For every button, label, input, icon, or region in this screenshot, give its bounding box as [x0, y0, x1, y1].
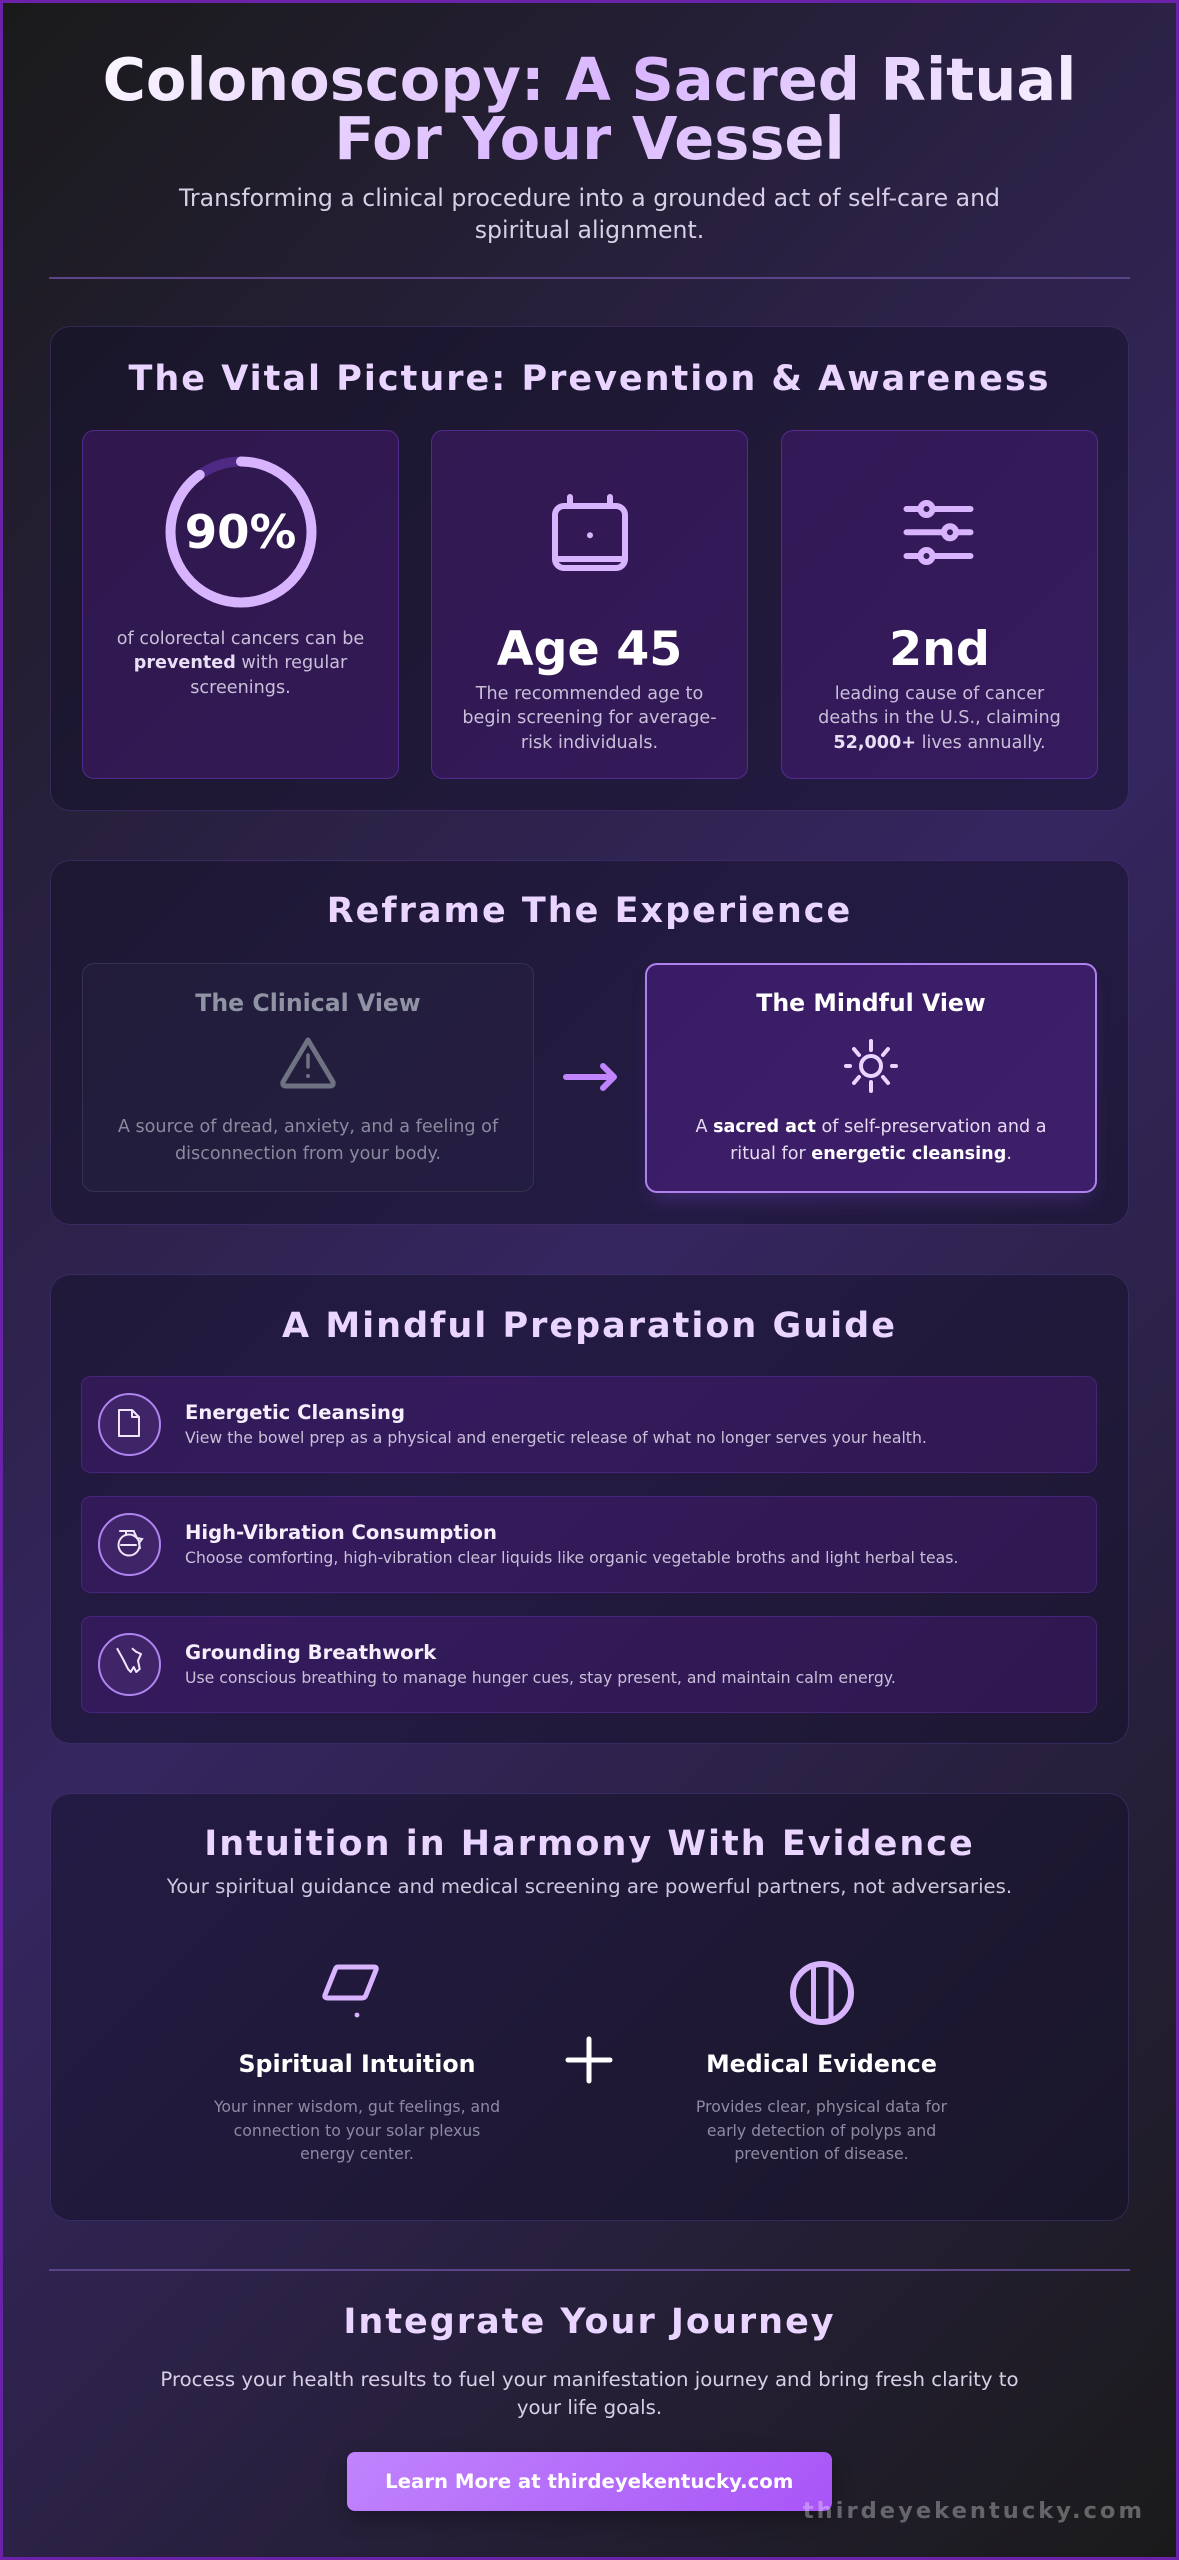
card title: The Clinical View [195, 989, 421, 1017]
stat card: age 45 [431, 430, 748, 779]
icon: parallelogram [322, 1964, 379, 2018]
stat value: 90% [185, 505, 296, 559]
card text: disconnection from your body. [175, 1144, 441, 1164]
step text: Use conscious breathing to manage hunger cues, stay present, and maintain calm energy. [185, 1668, 896, 1687]
step title: Grounding Breathwork [185, 1641, 436, 1664]
button: Learn More at thirdeyekentucky.com [385, 2470, 793, 2493]
heading: intuition: Intuition in Harmony With Evidence [204, 1824, 975, 1864]
panel: mindful preparation guide [50, 1274, 1129, 1744]
step: energetic cleansing [81, 1376, 1097, 1473]
footer [160, 2302, 1145, 2524]
title: Colonoscopy: A Sacred Ritual [103, 44, 1076, 114]
column text [696, 2097, 948, 2163]
column: spiritual intuition [214, 1964, 500, 2163]
header [103, 44, 1076, 244]
column: medical evidence [696, 1961, 948, 2163]
panel: intuition in harmony [50, 1793, 1129, 2221]
subtitle [178, 184, 1000, 244]
column text: Your inner wisdom, gut feelings, and [214, 2097, 500, 2116]
column text: prevention of disease. [734, 2144, 909, 2163]
icon: calendar [552, 494, 628, 571]
column text: Provides clear, physical data for [696, 2097, 947, 2116]
card text: A source of dread, anxiety, and a feeling of [118, 1117, 498, 1137]
icon: warning triangle [280, 1038, 336, 1088]
column text: energy center. [300, 2144, 414, 2163]
column title: Medical Evidence [706, 2050, 937, 2078]
heading: the vital picture: The Vital Picture: Prevention & Awareness [128, 358, 1050, 398]
stat card: 90% [82, 430, 399, 779]
step text: Choose comforting, high-vibration clear liquids like organic vegetable broths and light herbal teas. [185, 1548, 958, 1567]
title [50, 50, 1129, 168]
stat value: Age 45 [497, 622, 682, 677]
progress ring [166, 456, 316, 608]
button [346, 2452, 832, 2511]
icon: flask [98, 1513, 161, 1576]
heading: reframe: Reframe The Experience [327, 891, 852, 931]
panel: the vital picture [50, 326, 1129, 811]
step: high-vibration consumption [81, 1496, 1097, 1593]
stat description: deaths in the U.S., claiming [818, 708, 1061, 728]
stat description: risk individuals. [521, 733, 658, 753]
icon: breath [98, 1633, 161, 1696]
stat card: 2nd [781, 430, 1098, 779]
footer heading: Integrate Your Journey [343, 2302, 836, 2342]
stat description: 52,000+ lives annually. [833, 733, 1046, 753]
footer text [160, 2368, 1019, 2419]
card text: ritual for energetic cleansing. [730, 1144, 1012, 1164]
step title: Energetic Cleansing [185, 1401, 405, 1424]
card text: A sacred act of self-preservation and a [695, 1117, 1047, 1137]
stat description [117, 629, 364, 698]
stat value: 2nd [889, 622, 990, 677]
stat description: screenings. [190, 678, 291, 698]
card text [695, 1117, 1047, 1164]
subtitle: Transforming a clinical procedure into a grounded act of self-care and [179, 184, 1000, 212]
stat description [462, 684, 717, 753]
icon: sliders [904, 500, 974, 565]
step text: View the bowel prep as a physical and energetic release of what no longer serves your health. [185, 1428, 927, 1447]
watermark: thirdeyekentucky.com [803, 2498, 1145, 2524]
icon: sun [844, 1039, 898, 1093]
column text [214, 2097, 500, 2163]
stat description: of colorectal cancers can be [117, 629, 364, 649]
card title: The Mindful View [756, 989, 986, 1017]
arrow [563, 1063, 617, 1091]
card: the mindful view [645, 963, 1097, 1193]
title: For Your Vessel [334, 104, 845, 172]
plus sign [566, 2036, 612, 2084]
step title: High-Vibration Consumption [185, 1521, 497, 1544]
column text: early detection of polyps and [707, 2121, 936, 2140]
stat description [818, 684, 1061, 753]
icon: document [98, 1393, 161, 1456]
footer text: your life goals. [517, 2396, 662, 2419]
column text: connection to your solar plexus [234, 2121, 480, 2140]
panel: reframe the experience [50, 860, 1129, 1225]
card text [118, 1117, 498, 1164]
icon: circle with bars [790, 1961, 854, 2025]
heading: preparation guide: A Mindful Preparation Guide [282, 1306, 897, 1346]
stat description: begin screening for average- [462, 708, 717, 728]
subtitle: spiritual alignment. [475, 216, 704, 244]
stat description: leading cause of cancer [835, 684, 1044, 704]
step: grounding breathwork [81, 1616, 1097, 1713]
subheading: Your spiritual guidance and medical screening are powerful partners, not adversaries. [167, 1874, 1012, 1898]
stat description: The recommended age to [476, 684, 703, 704]
card: the clinical view [82, 963, 534, 1192]
stat description: prevented with regular [134, 653, 347, 673]
column title: Spiritual Intuition [238, 2050, 476, 2078]
footer text: Process your health results to fuel your manifestation journey and bring fresh clarity to [160, 2368, 1019, 2391]
